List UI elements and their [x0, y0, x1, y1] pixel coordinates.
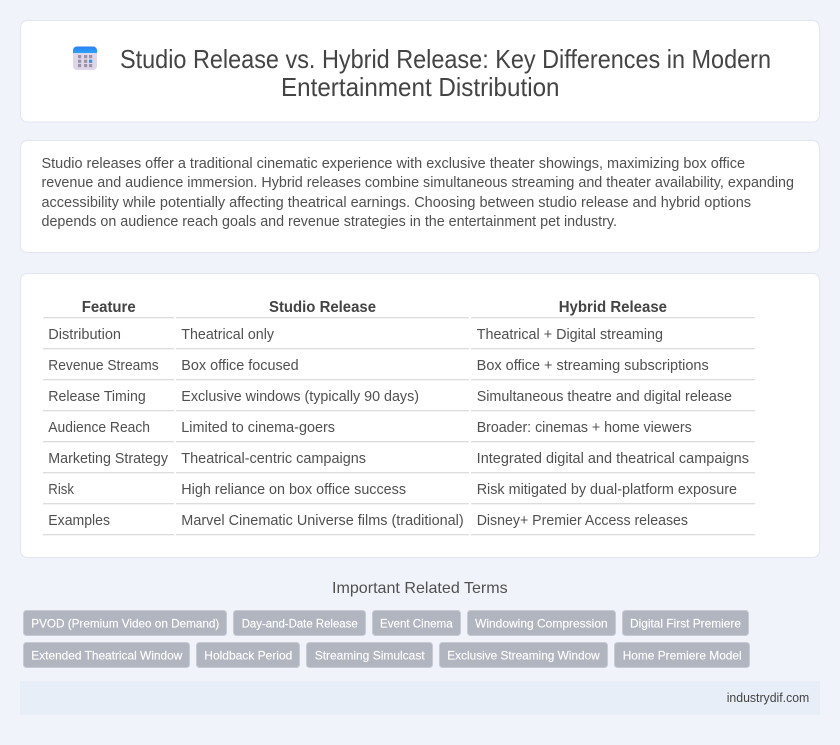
- icon: calendar: [73, 46, 97, 70]
- table row: release timing: Release Timing: [48, 389, 146, 405]
- tag: windowing compression: Windowing Compression: [475, 616, 608, 630]
- table row: risk: High reliance on box office success: [181, 482, 406, 498]
- title: Studio Release vs. Hybrid Release: Key Differences in Modern: [120, 46, 771, 74]
- text block: summary: depends on audience reach goals and revenue strategies in the entertainment pet industry.: [42, 214, 617, 230]
- footer bar: [20, 681, 820, 715]
- tag: event cinema: [372, 610, 460, 636]
- heading: related terms: Important Related Terms: [332, 580, 508, 597]
- tags: related terms: [24, 610, 750, 668]
- table row: release timing: Exclusive windows (typically 90 days): [181, 389, 419, 405]
- text block: summary: revenue and audience immersion. Hybrid releases combine simultaneous streaming and theater availability, expanding: [42, 175, 794, 191]
- table row: audience reach: Broader: cinemas + home viewers: [477, 420, 692, 436]
- tag: PVOD: PVOD (Premium Video on Demand): [31, 616, 219, 630]
- table row: risk: [43, 482, 755, 504]
- table row: marketing strategy: [43, 451, 755, 473]
- table row: audience reach: Audience Reach: [48, 420, 150, 436]
- table row: risk: Risk mitigated by dual-platform exposure: [477, 482, 737, 498]
- table row: marketing strategy: Integrated digital and theatrical campaigns: [477, 451, 749, 467]
- tag: exclusive streaming window: [440, 642, 608, 668]
- tag: digital first premiere: [622, 610, 748, 636]
- table row: examples: Marvel Cinematic Universe films (traditional): [181, 513, 464, 529]
- text block: summary: [42, 156, 794, 230]
- tag: extended theatrical window: [24, 642, 190, 668]
- table row: revenue streams: Revenue Streams: [48, 358, 159, 374]
- title: Entertainment Distribution: [281, 74, 560, 102]
- table row: audience reach: [43, 420, 755, 442]
- table row: marketing strategy: Theatrical-centric campaigns: [181, 451, 366, 467]
- table header row: [43, 299, 755, 318]
- table row: examples: Examples: [48, 513, 110, 529]
- table header row: Feature: [82, 299, 136, 316]
- text block: summary: Studio releases offer a traditional cinematic experience with exclusive theater showings, maximizing box office: [42, 156, 745, 172]
- tag: digital first premiere: Digital First Premiere: [630, 616, 741, 630]
- table row: distribution: Theatrical + Digital streaming: [477, 327, 663, 343]
- table row: release timing: [43, 389, 755, 411]
- text block: summary: accessibility while potentially affecting theatrical earnings. Choosing between studio release and hybrid options: [42, 195, 751, 211]
- table header row: Studio Release: [269, 299, 376, 316]
- tag: day-and-date: Day-and-Date Release: [242, 616, 358, 630]
- tag: event cinema: Event Cinema: [380, 616, 453, 630]
- tag: holdback period: Holdback Period: [204, 648, 292, 662]
- tag: PVOD: [24, 610, 226, 636]
- tag: exclusive streaming window: Exclusive Streaming Window: [447, 648, 600, 662]
- tag: streaming simulcast: [306, 642, 432, 668]
- table row: audience reach: Limited to cinema-goers: [181, 420, 335, 436]
- footer source text: industrydif.com: [727, 690, 809, 705]
- table row: marketing strategy: Marketing Strategy: [48, 451, 169, 467]
- tag: streaming simulcast: Streaming Simulcast: [315, 648, 425, 662]
- panel: comparison table: [20, 274, 820, 558]
- table row: distribution: Theatrical only: [181, 327, 275, 343]
- tag: windowing compression: [468, 610, 616, 636]
- table row: revenue streams: Box office + streaming subscriptions: [477, 358, 709, 374]
- panel: summary paragraph: [20, 140, 820, 252]
- table row: examples: Disney+ Premier Access releases: [477, 513, 688, 529]
- table row: release timing: Simultaneous theatre and digital release: [477, 389, 732, 405]
- tag: home premiere model: Home Premiere Model: [623, 648, 742, 662]
- title: [120, 46, 771, 102]
- table row: distribution: Distribution: [48, 327, 121, 343]
- table row: revenue streams: [43, 358, 755, 380]
- table row: examples: [43, 513, 755, 535]
- tag: holdback period: [196, 642, 300, 668]
- tag: extended theatrical window: Extended Theatrical Window: [31, 648, 183, 662]
- table row: distribution: [43, 327, 755, 349]
- tag: day-and-date: [234, 610, 366, 636]
- table row: risk: Risk: [48, 482, 75, 498]
- table header row: Hybrid Release: [559, 299, 667, 316]
- table row: revenue streams: Box office focused: [181, 358, 299, 374]
- tag: home premiere model: [614, 642, 750, 668]
- panel: header: [20, 20, 820, 122]
